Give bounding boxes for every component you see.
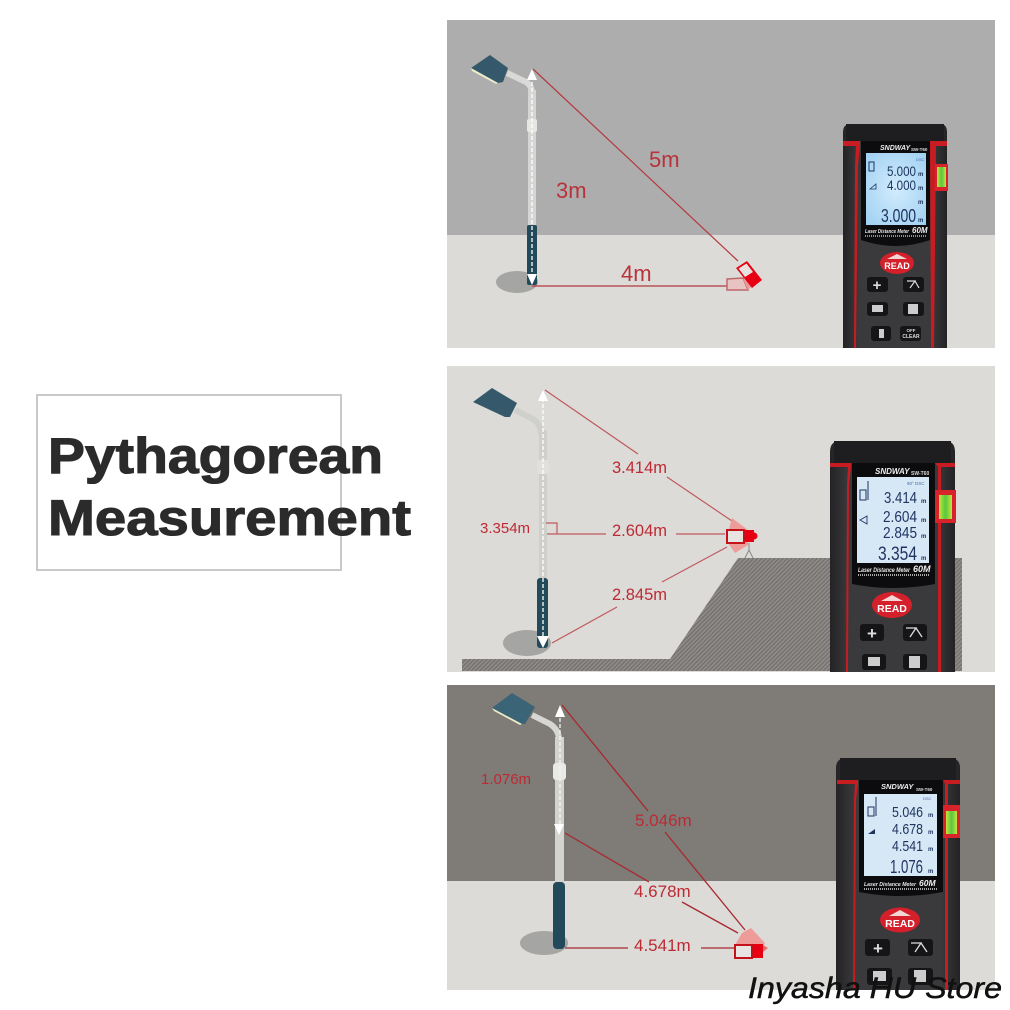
icon: meter on ground 1 [727, 261, 762, 290]
device: laser meter 3: SW-T60 [916, 787, 933, 792]
device: laser meter 3: m [928, 847, 933, 853]
device: laser meter 1: m [918, 186, 923, 192]
label: 5m: 5m [649, 147, 680, 172]
label: 3.354m: 3.354m [480, 520, 530, 537]
panel: three point measurement on slope [447, 366, 995, 672]
title box: Measurement [48, 490, 411, 546]
device: laser meter 2: m [921, 518, 926, 524]
device: laser meter 2: SW-T60 [911, 471, 929, 477]
device: laser meter 2: 2.845 [883, 525, 917, 542]
device: laser meter 1: 3.000 [881, 206, 916, 226]
device: laser meter 1 [843, 124, 948, 348]
device: laser meter 1: + [873, 277, 882, 294]
device: laser meter 2: SNDWAY [875, 467, 910, 476]
panel: height difference measurement [447, 685, 995, 990]
label: 4m: 4m [621, 261, 652, 286]
label: 4.541m: 4.541m [634, 936, 691, 955]
device: laser meter 2 [830, 441, 956, 672]
device: laser meter 2: + [867, 624, 877, 643]
device: laser meter 3: 4.541 [892, 838, 923, 855]
panel: 3-4-5 triangle measurement [447, 20, 995, 348]
device: laser meter 3: 4.678 [892, 821, 923, 838]
title text: Pythagorean [48, 428, 383, 484]
laser lines 2 [545, 390, 732, 643]
device: laser meter 2: m [921, 534, 926, 540]
device: laser meter 1: 4.000 [887, 177, 916, 193]
ground: hatched slope [462, 558, 962, 671]
device: laser meter 2: 90° DSC [907, 481, 925, 486]
device: laser meter 1: m [918, 200, 923, 206]
label: 2.604m: 2.604m [612, 522, 667, 540]
device: laser meter 1: 5.000 [887, 163, 916, 179]
device: laser meter 1: m [918, 218, 923, 224]
device: laser meter 3: 5.046 [892, 804, 923, 821]
device: laser meter 2: Laser Distance Meter [858, 568, 911, 574]
device: laser meter 2: 3.354 [878, 544, 917, 565]
label: 3m: 3m [556, 178, 587, 203]
device: laser meter 1: Laser Distance Meter [865, 229, 910, 235]
device: laser meter 3: m [928, 869, 933, 875]
device: laser meter 2: 3.414 [884, 490, 917, 507]
device: laser meter 1: 60M [912, 226, 928, 235]
device: laser meter 3 [836, 758, 960, 990]
device: laser meter 3: m [928, 830, 933, 836]
store watermark: Inyasha HU Store [748, 972, 1002, 1005]
device: laser meter 1: SW-T60 [911, 147, 928, 152]
device: laser meter 3: READ [885, 918, 915, 930]
device: laser meter 2: m [921, 499, 926, 505]
icon: street lamp 2 [473, 388, 551, 656]
device: laser meter 2: 60M [913, 564, 931, 574]
device: laser meter 3: + [873, 939, 883, 958]
label: 3.414m: 3.414m [612, 459, 667, 477]
device: laser meter 3: 1.076 [890, 857, 923, 877]
label: 2.845m: 2.845m [612, 586, 667, 604]
label: 4.678m: 4.678m [634, 882, 691, 901]
laser lines 1 [532, 69, 738, 286]
title box [37, 395, 411, 570]
device: laser meter 2: m [921, 556, 926, 562]
device: laser meter 3: 60M [919, 878, 936, 888]
icon: meter on ground 3 [735, 928, 768, 958]
device: laser meter 3: DSC [923, 796, 932, 801]
device: laser meter 3: m [928, 813, 933, 819]
device: laser meter 1: DSC [916, 157, 925, 162]
device: laser meter 3: SNDWAY [881, 782, 914, 791]
device: laser meter 3: Laser Distance Meter [864, 882, 917, 888]
device: laser meter 1: m [918, 172, 923, 178]
icon: street lamp 3 [492, 693, 568, 955]
device: laser meter 1: SNDWAY [880, 145, 912, 152]
device: laser meter 1: OFF [906, 328, 916, 333]
device: laser meter 2: READ [877, 603, 907, 615]
device: laser meter 2: 2.604 [883, 509, 917, 526]
device: laser meter 1: CLEAR [902, 334, 920, 340]
icon: street lamp 1 [471, 55, 538, 293]
laser lines 3 [562, 705, 745, 948]
device: laser meter 1: READ [884, 261, 910, 271]
label: 5.046m: 5.046m [635, 811, 692, 830]
icon: meter on tripod [726, 518, 758, 558]
label: 1.076m: 1.076m [481, 771, 531, 788]
